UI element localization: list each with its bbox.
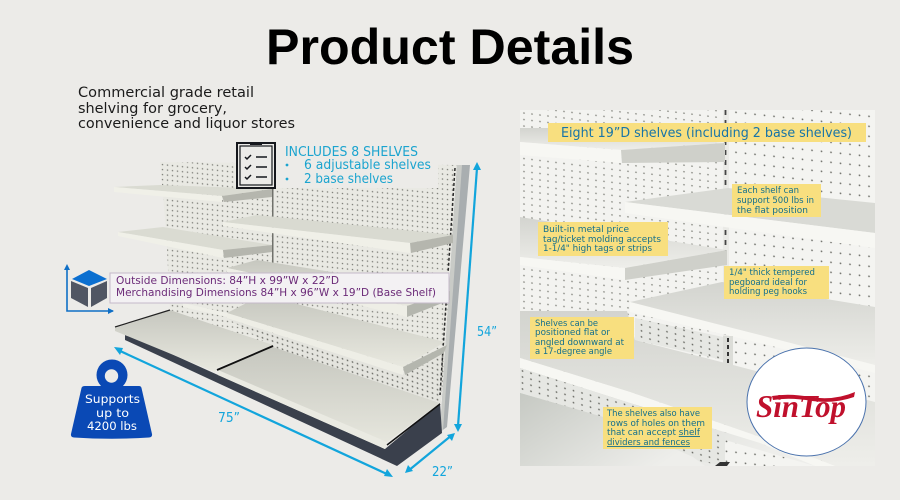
kick plate <box>125 333 442 466</box>
arrow: depth 22 inches <box>405 433 455 480</box>
icon: weight 4200 lbs <box>71 360 152 439</box>
callout: price tag molding: 1-1/4" high tags or strips <box>543 244 652 254</box>
shelf middle right <box>227 260 450 306</box>
icon: clipboard checklist <box>237 142 275 188</box>
arrow: width 75 inches: 75” <box>218 411 240 426</box>
arrow: height 54 inches: 54” <box>477 325 497 340</box>
callout: shelf angle: a 17-degree angle <box>535 347 612 357</box>
dimensions label <box>110 273 449 303</box>
callout: price tag molding: Built-in metal price <box>543 225 629 235</box>
includes shelves list: 6 adjustable shelves <box>304 158 431 173</box>
panel: shelf close-up photo <box>520 110 875 466</box>
callout: dividers and fences: The shelves also have <box>606 409 700 419</box>
callout: dividers and fences <box>603 407 712 449</box>
includes shelves list <box>285 145 431 187</box>
callout: shelf angle: Shelves can be <box>535 319 598 329</box>
callout: pegboard: pegboard ideal for <box>729 278 807 288</box>
shelf upper right <box>223 215 453 243</box>
callout: dividers and fences: dividers and fences <box>607 438 690 448</box>
icon: weight 4200 lbs: 4200 lbs <box>87 419 137 433</box>
shelf A <box>520 128 725 163</box>
upright slot strip <box>723 110 729 336</box>
arrow: height 54 inches <box>454 162 497 432</box>
icon: 3D dimensions cube <box>64 264 114 314</box>
callout: pegboard: 1/4" thick tempered <box>729 268 815 278</box>
intro text: Commercial grade retail <box>78 85 254 101</box>
shelf E <box>520 311 875 466</box>
shelf upper left <box>114 185 272 196</box>
callout: shelf capacity: support 500 lbs in <box>737 196 814 206</box>
base shelf right <box>218 347 440 449</box>
callout: pegboard <box>724 266 829 299</box>
logo: SinTop: SinTop <box>756 388 846 424</box>
callout: shelf angle: positioned flat or <box>535 328 610 338</box>
arrow: depth 22 inches: 22” <box>432 465 453 480</box>
shelving unit illustration <box>114 142 470 466</box>
callout: shelf angle: angled downward at <box>535 338 625 348</box>
title: Product Details <box>266 19 634 75</box>
arrow: width 75 inches <box>114 347 393 477</box>
callout: dividers and fences: rows of holes on them <box>607 419 705 429</box>
logo: SinTop <box>747 348 866 456</box>
includes shelves list: INCLUDES 8 SHELVES <box>285 145 418 160</box>
shelf middle left <box>118 227 272 250</box>
intro text <box>78 85 295 132</box>
callout: shelf capacity: Each shelf can <box>737 186 799 196</box>
shelf D <box>631 282 875 368</box>
intro text: convenience and liquor stores <box>78 116 295 132</box>
upright post <box>440 165 470 432</box>
dimensions label: Outside Dimensions: 84”H x 99”W x 22”D <box>116 275 339 287</box>
icon: weight 4200 lbs: Supports <box>85 392 140 406</box>
shelf lower right <box>227 295 445 367</box>
icon: weight 4200 lbs: up to <box>96 406 129 420</box>
callout: shelf angle <box>530 317 634 359</box>
callout: price tag molding <box>538 222 668 256</box>
callout: shelf capacity: the flat position <box>737 206 808 216</box>
shelf C <box>520 217 727 280</box>
callout: pegboard: holding peg hooks <box>729 287 807 297</box>
base shelf left <box>115 310 273 372</box>
callout: eight shelves heading: Eight 19”D shelves (including 2 base shelves) <box>561 126 852 141</box>
dimensions label: Merchandising Dimensions 84”H x 96”W x 19”D (Base Shelf) <box>116 287 436 299</box>
shelf lower left <box>183 303 227 317</box>
callout: shelf capacity <box>732 184 821 217</box>
callout: price tag molding: tag/ticket molding accepts <box>543 235 661 245</box>
intro text: shelving for grocery, <box>78 101 227 117</box>
callout: dividers and fences: that can accept shelf <box>607 428 701 438</box>
includes shelves list: 2 base shelves <box>304 172 393 187</box>
shelf B <box>625 188 875 248</box>
